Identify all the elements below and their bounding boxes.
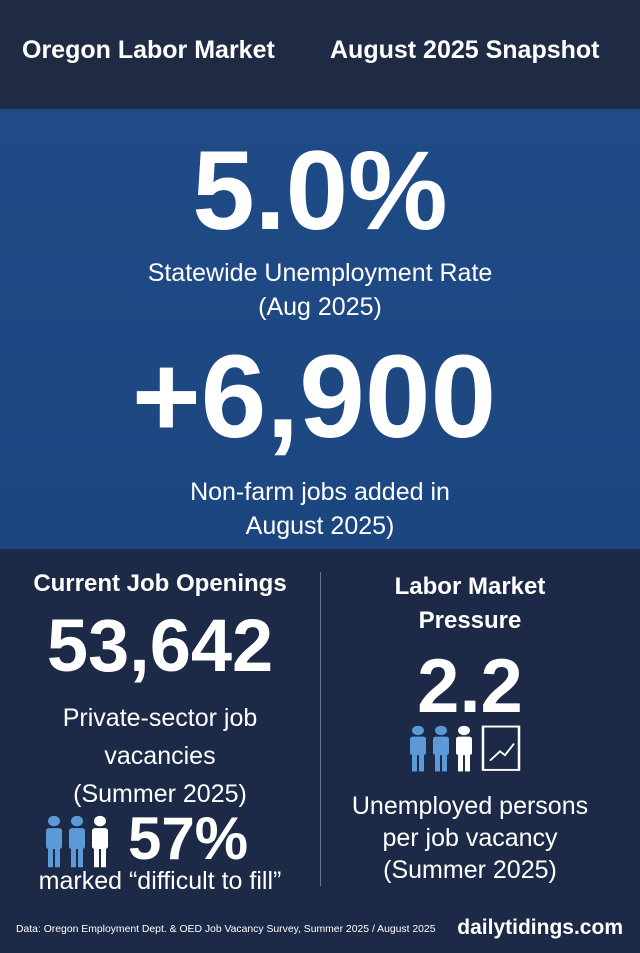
label: ratio <box>352 792 588 884</box>
icon: people <box>46 816 108 868</box>
heading: Labor Market <box>395 573 545 600</box>
label: unemployment: (Aug 2025) <box>258 293 382 321</box>
label: difficult: marked “difficult to fill” <box>39 867 281 895</box>
label: unemployment <box>148 259 492 321</box>
title <box>22 36 600 64</box>
stat: openings: 53,642 <box>47 604 273 687</box>
panel: labor market pressure <box>352 573 588 884</box>
label: openings: vacancies <box>104 742 216 770</box>
label: jobs added: Non-farm jobs added in <box>190 478 450 506</box>
label: openings: (Summer 2025) <box>73 780 247 808</box>
label: jobs added: August 2025) <box>246 512 394 540</box>
label: ratio: per job vacancy <box>382 824 558 852</box>
heading: Current Job Openings <box>33 570 287 597</box>
divider <box>320 572 321 886</box>
stat: 57%: 57% <box>128 805 248 872</box>
footer: brand: dailytidings.com <box>457 916 623 939</box>
header band <box>0 0 640 109</box>
stat: jobs added: +6,900 <box>132 331 496 463</box>
icon: people and chart <box>410 726 520 772</box>
panel: headline stats <box>0 109 640 549</box>
heading: Pressure <box>419 607 521 634</box>
label: ratio: Unemployed persons <box>352 792 588 820</box>
stat: ratio: 2.2 <box>417 644 523 729</box>
footer: source: Data: Oregon Employment Dept. & OED Job Vacancy Survey, Summer 2025 / August 2025 <box>16 924 436 935</box>
label: openings: Private-sector job <box>63 704 257 732</box>
stat: unemployment rate: 5.0% <box>192 128 448 253</box>
label: unemployment: Statewide Unemployment Rate <box>148 259 492 287</box>
heading <box>395 573 546 634</box>
title: August 2025 Snapshot <box>330 36 600 64</box>
label: openings <box>63 704 257 808</box>
title: Oregon Labor Market <box>22 36 275 64</box>
label: jobs added <box>190 478 450 540</box>
panel: job openings <box>33 570 287 895</box>
label: ratio: (Summer 2025) <box>383 856 557 884</box>
